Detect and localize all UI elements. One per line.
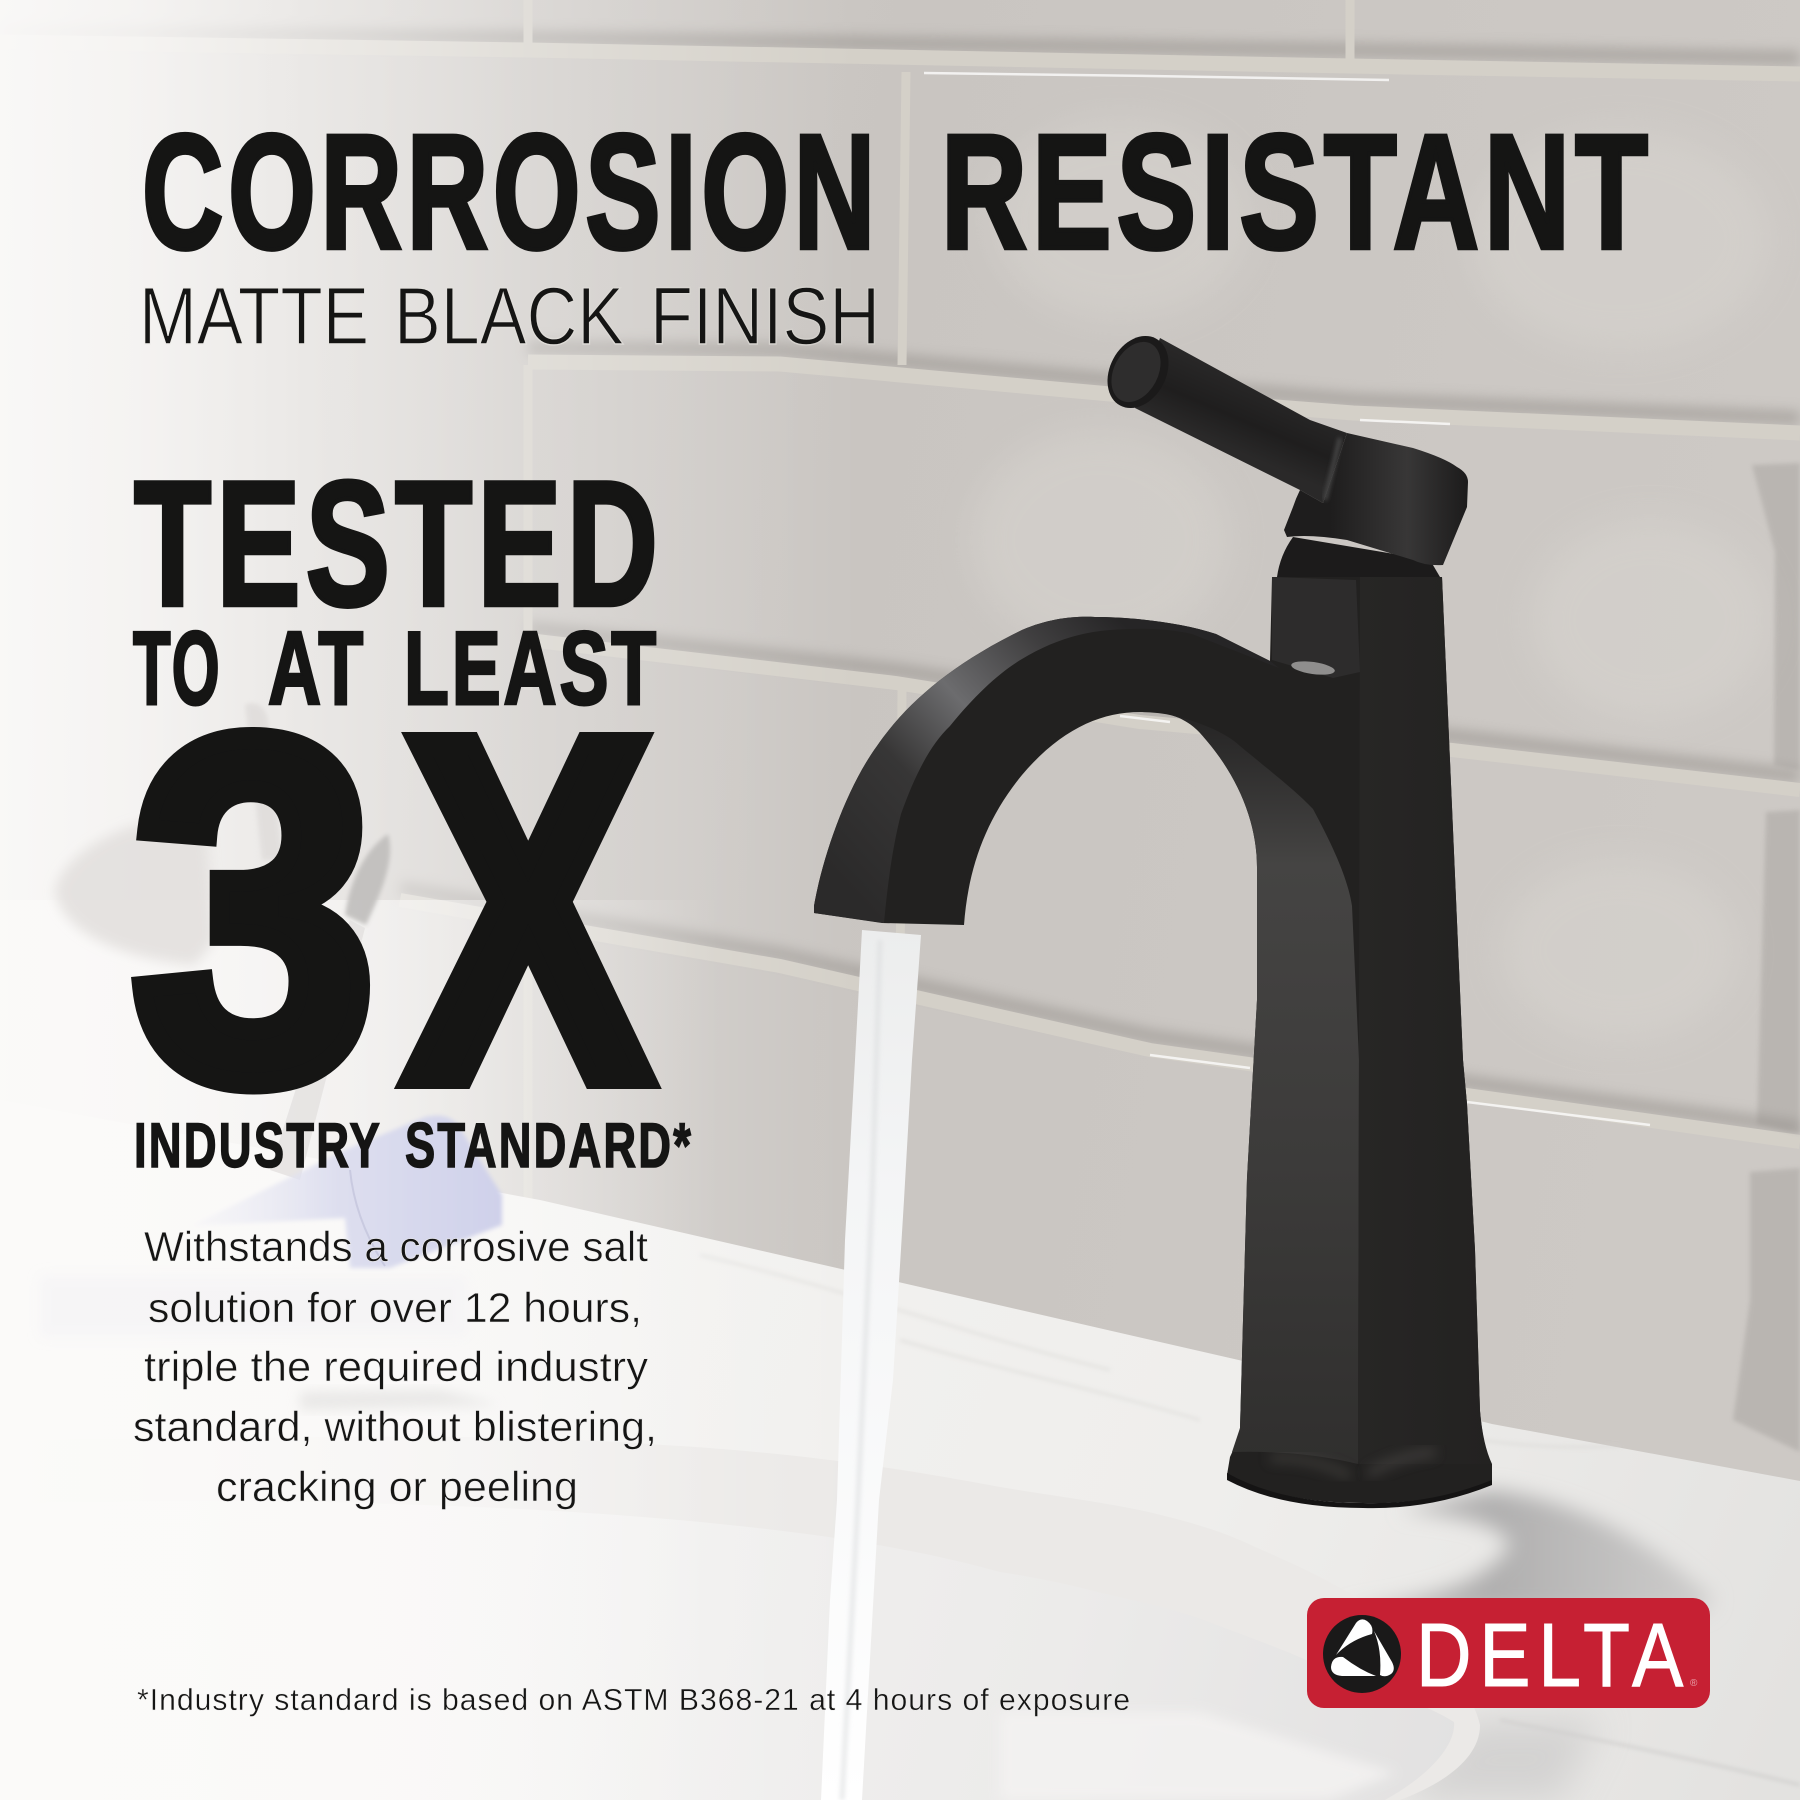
body text: triple the required industry [144,1343,648,1390]
base ring [1227,1473,1492,1508]
lever crease highlight [1325,438,1340,500]
body text: Withstands a corrosive salt [144,1223,648,1270]
collar [1272,577,1360,678]
logo: delta: DELTA [1416,1606,1691,1706]
makeup brush: small [270,834,390,1180]
callout: to at least: AT [268,611,366,727]
tray shadow [300,1390,500,1410]
collar ring [1290,659,1336,677]
countertop [0,1100,1800,1800]
callout: industry standard [134,1111,693,1181]
icon: delta symbol [1323,1615,1401,1693]
faded bathroom accessories [40,703,502,1410]
body text: cracking or peeling [216,1463,578,1510]
faucet [814,325,1492,1508]
makeup brush: large [55,703,282,965]
sink basin [0,1437,1480,1800]
faucet neck [1277,537,1440,577]
callout: tested: TESTED [134,444,663,643]
basin interior [0,1501,1454,1800]
callout: 3X: 3 [132,638,376,1182]
basin rim band [0,1437,1480,1800]
callout: industry standard: INDUSTRY [134,1111,382,1181]
callout: industry standard: STANDARD* [405,1111,693,1181]
tray [40,1276,467,1337]
faucet body inner arch face [1168,714,1359,1464]
body text: standard, without blistering, [133,1403,657,1450]
faucet body right face [1358,577,1490,1464]
callout: to at least: LEAST [404,611,659,727]
callout: to at least: TO [133,611,222,727]
callout: 3X: X [406,638,652,1182]
logo: delta: ® [1690,1678,1698,1689]
footnote: *Industry standard is based on ASTM B368-21 at 4 hours of exposure [137,1682,1131,1717]
white fade overlay [0,0,860,1800]
heading: corrosion resistant: CORROSION [142,100,880,283]
subheading: matte black finish: FINISH [650,271,880,362]
faucet handle lever [1095,325,1347,503]
faucet hub [1284,433,1468,565]
faucet shadow on counter [1340,1490,1714,1612]
subheading: matte black finish [139,271,880,362]
callout: to at least [133,611,659,727]
subheading: matte black finish: BLACK [394,271,624,362]
callout: 3X [132,638,652,1182]
spout lit top [814,617,1279,923]
body text [133,1223,657,1510]
running water [821,930,921,1800]
tumbler, purple [191,1116,502,1268]
logo: delta [1307,1598,1710,1708]
subheading: matte black finish: MATTE [139,271,369,362]
faucet body and spout [814,577,1492,1503]
body text: solution for over 12 hours, [148,1284,642,1331]
basin reflection [1000,1712,1397,1800]
